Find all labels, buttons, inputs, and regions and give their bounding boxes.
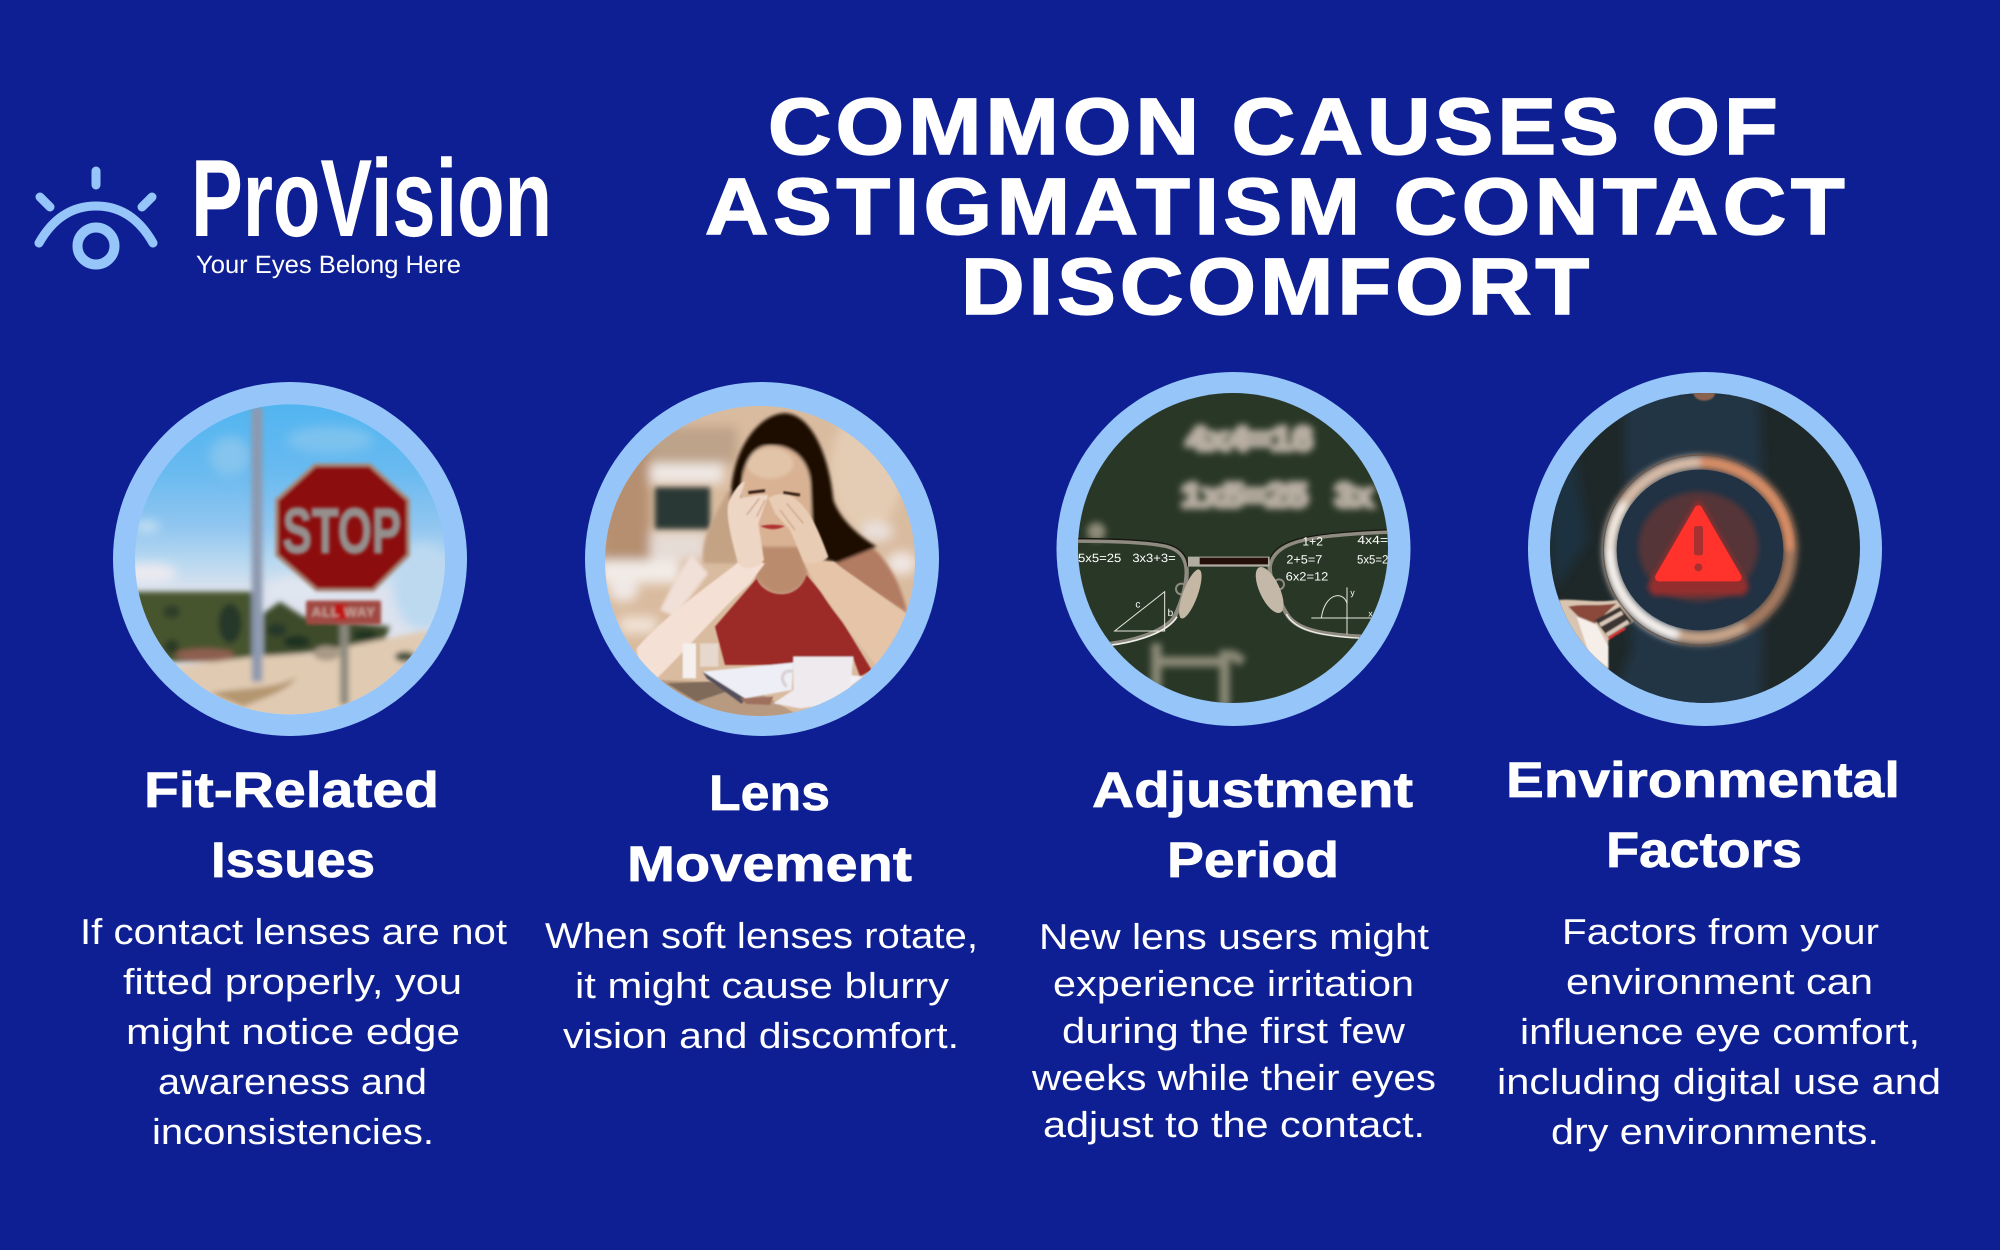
text block: influence eye comfort,: [1520, 1011, 1920, 1052]
text block: [1031, 916, 1436, 1145]
panel: fit-related issues: [80, 382, 507, 1152]
heading: Issues: [211, 832, 375, 888]
text block: New lens users might: [1039, 916, 1429, 957]
icon: ring with eyeglasses on chalkboard photo: 6x2=12: [1286, 570, 1328, 583]
icon: ring with eyeglasses on chalkboard photo: 3x: [1335, 477, 1373, 514]
icon: ring with woman rubbing eyes photo: [585, 382, 939, 736]
icon: ring with eyeglasses on chalkboard photo: 4x4=16: [1186, 420, 1313, 457]
panel: environmental factors: [1497, 372, 1941, 1152]
magnifier rim: [1610, 462, 1790, 638]
text block: [80, 911, 507, 1152]
icon: ring with eyeglasses on chalkboard photo: b: [1168, 607, 1173, 618]
title: COMMON CAUSES OF: [768, 82, 1778, 171]
text block: [545, 915, 978, 1056]
brand name: ProVision: [191, 137, 552, 260]
title: DISCOMFORT: [961, 242, 1589, 331]
icon: ring with eyeglasses on chalkboard photo: 5x5=2: [1357, 553, 1388, 566]
text block: If contact lenses are not: [80, 911, 507, 952]
icon: ring with eyeglasses on chalkboard photo: 1x5=25: [1181, 477, 1308, 514]
icon: ring with magnifier warning photo: [1528, 372, 1882, 726]
text block: including digital use and: [1497, 1061, 1941, 1102]
heading: Movement: [627, 836, 912, 892]
logo: [39, 137, 552, 279]
icon: ring with stop sign photo: STOP: [283, 496, 401, 566]
heading: [627, 765, 912, 892]
icon: ring with eyeglasses on chalkboard photo: [1056, 372, 1410, 726]
icon: ring with eyeglasses on chalkboard photo: 5x5=25: [1078, 551, 1121, 565]
heading: Fit-Related: [144, 762, 439, 818]
icon: ring with stop sign photo: [113, 382, 467, 736]
text block: When soft lenses rotate,: [545, 915, 978, 956]
icon: ring with eyeglasses on chalkboard photo: 4x4=: [1357, 533, 1388, 547]
text block: adjust to the contact.: [1043, 1104, 1425, 1145]
text block: awareness and: [158, 1061, 427, 1102]
heading: Factors: [1606, 822, 1802, 878]
heading: [1092, 762, 1413, 888]
text block: Factors from your: [1562, 911, 1879, 952]
heading: Period: [1167, 832, 1339, 888]
tagline: Your Eyes Belong Here: [196, 251, 461, 279]
heading: Adjustment: [1092, 762, 1413, 818]
icon: ring with stop sign photo: ALL WAY: [312, 605, 375, 620]
text block: fitted properly, you: [123, 961, 462, 1002]
icon: ring with eyeglasses on chalkboard photo: c: [1135, 599, 1140, 610]
icon: ring with eyeglasses on chalkboard photo: y: [1350, 587, 1355, 597]
icon: ring with eyeglasses on chalkboard photo: x: [1368, 609, 1373, 619]
icon: ring with eyeglasses on chalkboard photo: 3x3+3=: [1132, 551, 1176, 565]
icon: eye: [39, 171, 153, 264]
text block: might notice edge: [126, 1011, 460, 1052]
text block: weeks while their eyes: [1031, 1057, 1436, 1098]
text block: during the first few: [1062, 1010, 1406, 1051]
title: [705, 82, 1845, 331]
title: ASTIGMATISM CONTACT: [705, 162, 1845, 251]
panel: lens movement: [545, 382, 978, 1056]
heading: [144, 762, 439, 888]
heading: [1506, 752, 1900, 878]
text block: dry environments.: [1551, 1111, 1879, 1152]
text block: environment can: [1566, 961, 1873, 1002]
text block: vision and discomfort.: [563, 1015, 959, 1056]
text block: inconsistencies.: [152, 1111, 434, 1152]
text block: experience irritation: [1053, 963, 1414, 1004]
heading: Environmental: [1506, 752, 1900, 808]
icon: ring with eyeglasses on chalkboard photo: 1+2: [1302, 534, 1323, 548]
text block: it might cause blurry: [575, 965, 949, 1006]
panel: adjustment period: [1031, 372, 1436, 1145]
text block: [1497, 911, 1941, 1152]
heading: Lens: [709, 765, 830, 821]
icon: ring with eyeglasses on chalkboard photo: 2+5=7: [1286, 552, 1322, 566]
